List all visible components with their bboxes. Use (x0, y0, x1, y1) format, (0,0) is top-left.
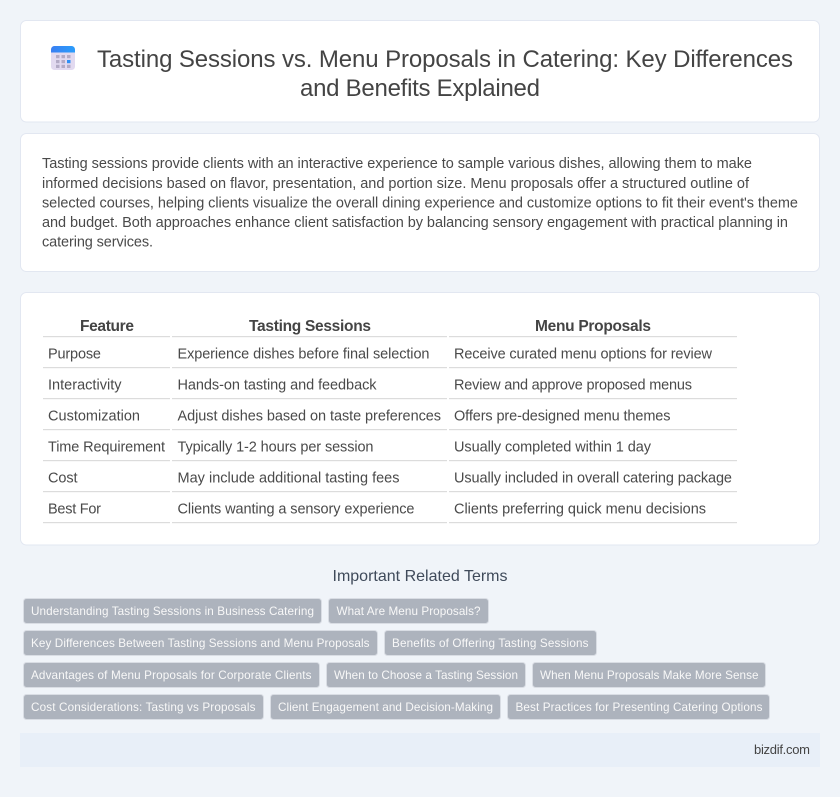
tag: Benefits of Offering Tasting Sessions (392, 637, 589, 650)
row: best for (43, 502, 737, 523)
row: interactivity: Interactivity (48, 378, 122, 394)
row: cost (43, 470, 737, 492)
tag (24, 662, 320, 688)
footer: bizdif.com (754, 742, 810, 757)
row: interactivity: Review and approve proposed menus (454, 378, 692, 394)
tag (24, 630, 378, 656)
row: purpose: Receive curated menu options for review (454, 346, 713, 362)
row: interactivity (43, 378, 737, 399)
tag: Client Engagement and Decision-Making (278, 701, 493, 714)
tag: Key Differences Between Tasting Sessions and Menu Proposals (31, 637, 370, 650)
tag: Best Practices for Presenting Catering Options (516, 701, 763, 714)
row: purpose: Experience dishes before final selection (178, 346, 430, 362)
row: interactivity: Hands-on tasting and feedback (178, 378, 377, 394)
tag (328, 598, 488, 624)
intro paragraph: Tasting sessions provide clients with an interactive experience to sample various dishes, allowing them to make (42, 156, 752, 172)
row: cost: Cost (48, 470, 78, 486)
title (97, 46, 793, 102)
row: time requirement: Time Requirement (48, 440, 165, 456)
tag: Cost Considerations: Tasting vs Proposals (31, 701, 256, 714)
tag (24, 598, 322, 624)
icon: calendar (51, 46, 75, 70)
intro paragraph: and budget. Both approaches enhance client satisfaction by balancing sensory engagement with practical planning in (42, 215, 788, 231)
row: time requirement (43, 440, 737, 461)
tag (24, 694, 264, 720)
row: purpose (43, 346, 737, 368)
table header (43, 318, 737, 337)
row: customization: Customization (48, 408, 140, 424)
intro paragraph: selected courses, helping clients visualize the overall dining experience and customize options to fit their event's theme (42, 196, 798, 212)
tag (384, 630, 596, 656)
intro paragraph: catering services. (42, 234, 153, 250)
title: Tasting Sessions vs. Menu Proposals in Catering: Key Differences (97, 46, 793, 73)
tag: When Menu Proposals Make More Sense (540, 669, 758, 682)
tag: Understanding Tasting Sessions in Business Catering (31, 605, 314, 618)
panel: comparison table (20, 292, 820, 545)
tag: What Are Menu Proposals? (336, 605, 481, 618)
tag: When to Choose a Tasting Session (334, 669, 518, 682)
tag (532, 662, 766, 688)
table header: Menu Proposals (535, 318, 651, 335)
row: customization: Offers pre-designed menu themes (454, 408, 670, 424)
row: time requirement: Typically 1-2 hours per session (178, 440, 374, 456)
row: best for: Clients preferring quick menu decisions (454, 502, 706, 518)
tag: Advantages of Menu Proposals for Corporate Clients (31, 669, 312, 682)
row: time requirement: Usually completed within 1 day (454, 440, 652, 456)
row: purpose: Purpose (48, 346, 101, 362)
footer (20, 733, 820, 767)
heading: important related terms: Important Related Terms (332, 568, 508, 585)
row: customization (43, 408, 737, 430)
table header: Feature (80, 318, 134, 335)
intro paragraph: informed decisions based on flavor, presentation, and portion size. Menu proposals offer a structured outline of (42, 176, 750, 192)
table header: Tasting Sessions (249, 318, 371, 335)
row: cost: May include additional tasting fees (178, 470, 400, 486)
header panel (20, 20, 820, 122)
tag (508, 694, 770, 720)
row: cost: Usually included in overall catering package (454, 470, 732, 486)
row: customization: Adjust dishes based on taste preferences (178, 408, 441, 424)
tag (326, 662, 526, 688)
related terms tags (24, 598, 770, 720)
tag (270, 694, 500, 720)
panel: introduction (20, 134, 820, 272)
title: and Benefits Explained (300, 75, 540, 102)
intro paragraph (42, 156, 798, 250)
row: best for: Best For (48, 502, 101, 518)
row: best for: Clients wanting a sensory experience (178, 502, 414, 518)
